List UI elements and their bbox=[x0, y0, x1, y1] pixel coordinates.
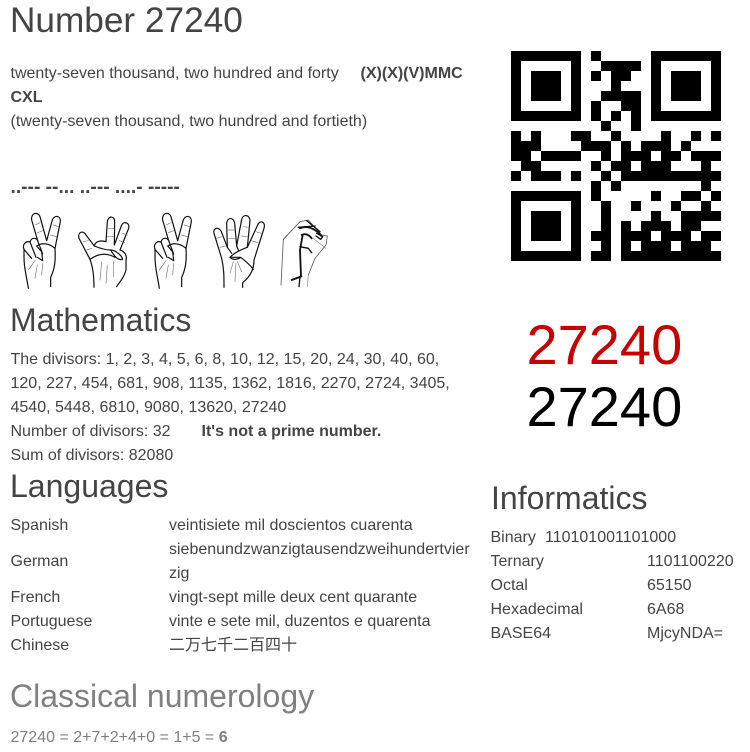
text block: number in words and roman numeral: twenty-seven thousand, two hundred and forty bbox=[10, 65, 339, 82]
text block: divisors: It's not a prime number. bbox=[202, 423, 381, 440]
table: languages: siebenundzwanzigtausendzweihundertvier bbox=[169, 541, 470, 558]
text block: numerology sum: 27240 = 2+7+2+4+0 = 1+5 = 6 bbox=[10, 729, 228, 746]
table: informatics: 65150 bbox=[647, 577, 692, 594]
table: informatics: Ternary bbox=[490, 553, 544, 570]
table: informatics: 110101001101000 bbox=[545, 529, 676, 546]
QR data modules bbox=[511, 51, 721, 261]
icon: hand sign 7 bbox=[79, 217, 129, 287]
table: informatics: MjcyNDA= bbox=[647, 625, 723, 642]
icon: hand sign 0 bbox=[281, 220, 327, 287]
table: languages bbox=[10, 517, 470, 654]
table: informatics: 6A68 bbox=[647, 601, 684, 618]
heading: languages: Languages bbox=[10, 468, 168, 504]
text block: divisors: 120, 227, 454, 681, 908, 1135, 1362, 1816, 2270, 2724, 3405, bbox=[10, 375, 450, 392]
table: informatics: Hexadecimal bbox=[490, 601, 583, 618]
black number: 27240 bbox=[526, 375, 682, 438]
text block: number in words and roman numeral: (twenty-seven thousand, two hundred and fortieth) bbox=[10, 113, 367, 130]
table: languages: veintisiete mil doscientos cuarenta bbox=[169, 517, 413, 534]
title: Number 27240 bbox=[10, 1, 243, 40]
morse code: ..--- --... ..--- ....- ----- bbox=[10, 177, 180, 198]
text block: divisors: The divisors: 1, 2, 3, 4, 5, 6, 8, 10, 12, 15, 20, 24, 30, 40, 60, bbox=[10, 351, 439, 368]
heading: classical numerology: Classical numerology bbox=[10, 678, 314, 714]
text block: number in words and roman numeral: CXL bbox=[10, 89, 42, 106]
heading: informatics: Informatics bbox=[491, 480, 647, 516]
sign language hands bbox=[22, 212, 328, 289]
text block: number in words and roman numeral: (X)(X)(V)MMC bbox=[360, 65, 463, 82]
table: informatics: Octal bbox=[490, 577, 528, 594]
table: languages: vingt-sept mille deux cent quarante bbox=[169, 589, 417, 606]
red number: 27240 bbox=[526, 313, 682, 376]
table: languages: French bbox=[10, 589, 60, 606]
table: informatics: BASE64 bbox=[490, 625, 551, 642]
QR finder patterns bbox=[511, 51, 721, 261]
table: languages: zig bbox=[169, 565, 189, 582]
table: languages: vinte e sete mil, duzentos e quarenta bbox=[169, 613, 430, 630]
text block: divisors: Sum of divisors: 82080 bbox=[10, 447, 173, 464]
table: languages: German bbox=[10, 553, 68, 570]
table: informatics: 1101100220 bbox=[647, 553, 734, 570]
icon: hand sign 4 bbox=[214, 216, 264, 287]
text block: divisors: Number of divisors: 32 bbox=[10, 423, 171, 440]
table: languages: 二万七千二百四十 bbox=[169, 637, 297, 654]
QR code bbox=[511, 51, 721, 261]
text block: divisors bbox=[10, 351, 450, 464]
table: languages: Portuguese bbox=[10, 613, 92, 630]
heading: mathematics: Mathematics bbox=[10, 302, 191, 338]
table: languages: Spanish bbox=[10, 517, 68, 534]
text block: divisors: 4540, 5448, 6810, 9080, 13620, 27240 bbox=[10, 399, 286, 416]
table: informatics: Binary bbox=[490, 529, 536, 546]
icon: hand sign 2 again bbox=[154, 213, 191, 288]
table: informatics bbox=[490, 529, 734, 642]
table: languages: Chinese bbox=[10, 637, 69, 654]
icon: hand sign 2 bbox=[23, 213, 60, 288]
text block: number in words and roman numeral bbox=[10, 65, 463, 130]
